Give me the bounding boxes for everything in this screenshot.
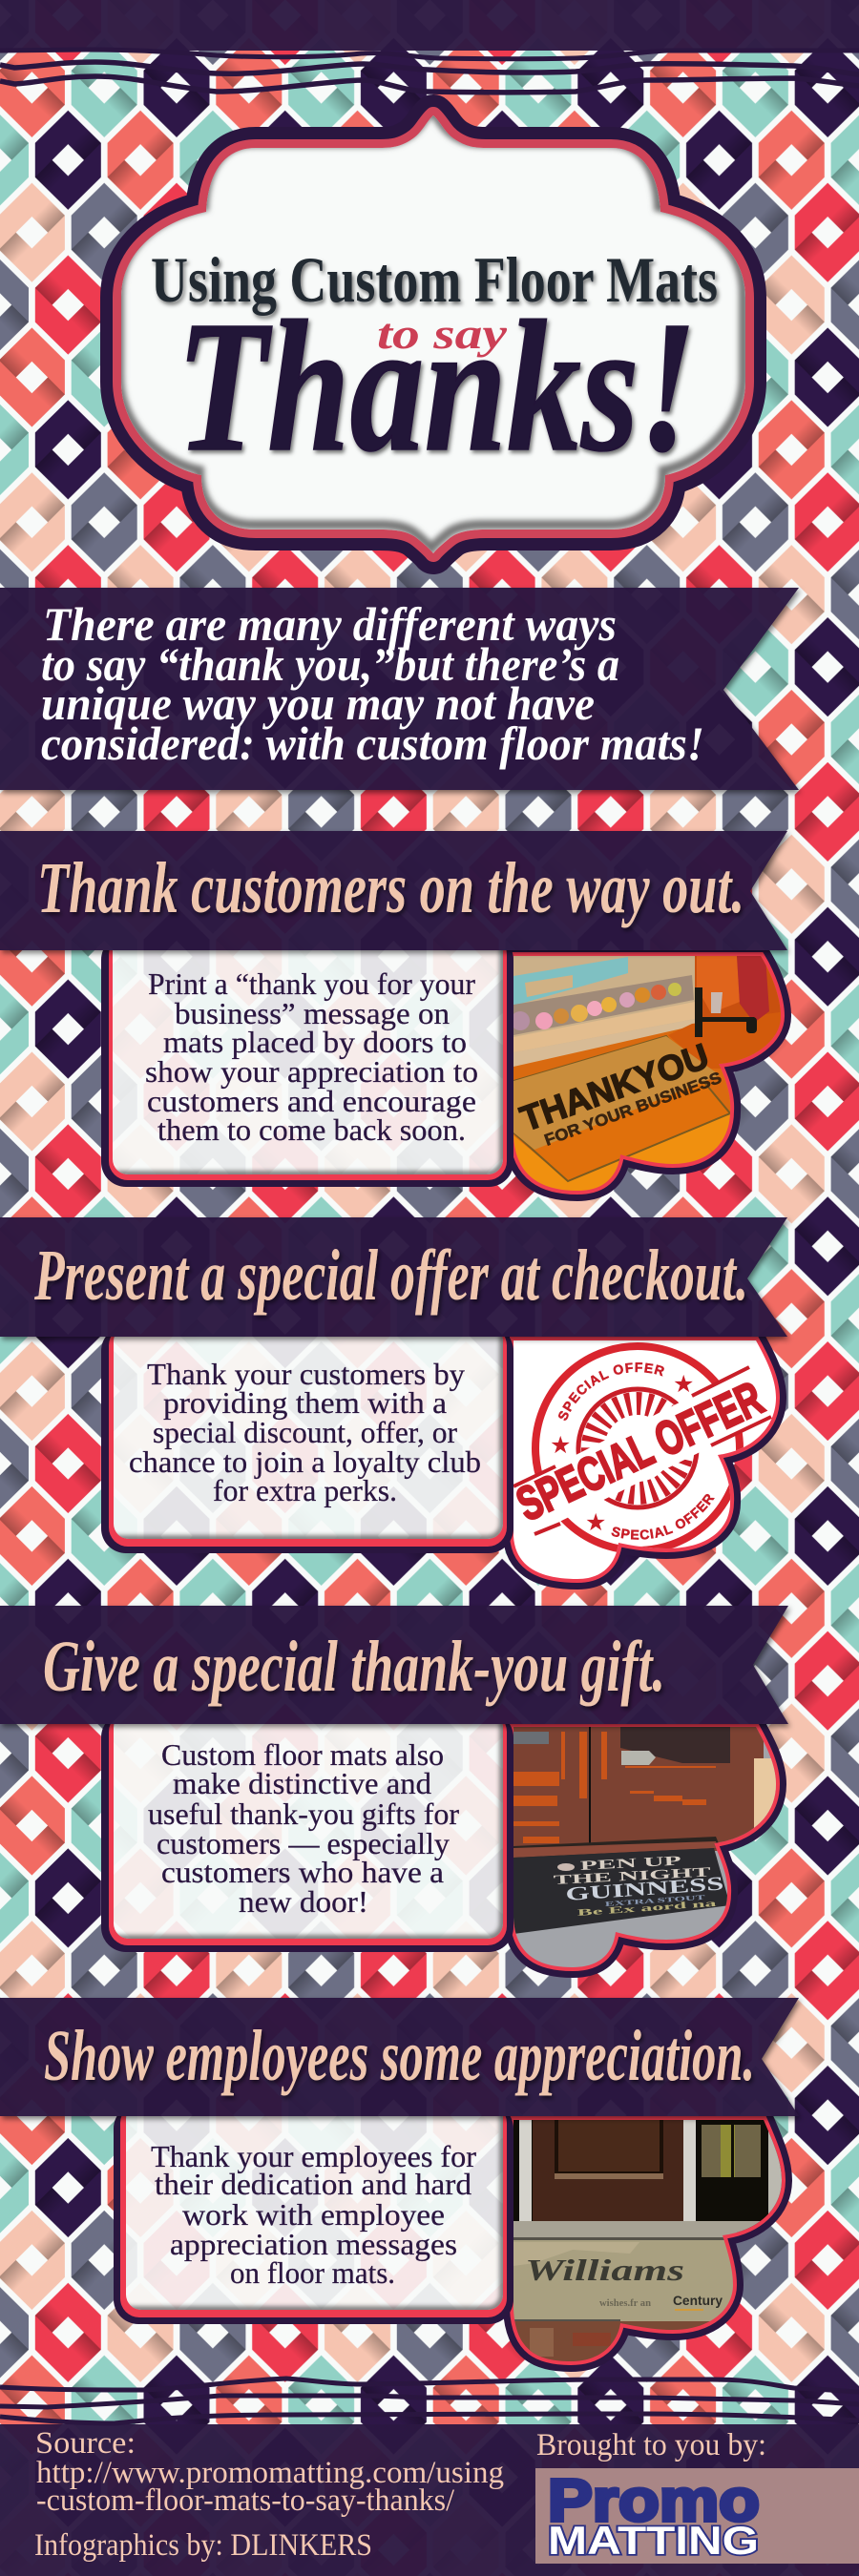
- logo: Promo Matting: [535, 2468, 859, 2564]
- card 2 body text: chance to join a loyalty club: [129, 1444, 481, 1479]
- card 2 body text: providing them with a: [163, 1385, 447, 1420]
- source text: -custom-floor-mats-to-say-thanks/: [36, 2483, 455, 2518]
- card 3 body text: useful thank-you gifts for: [148, 1797, 459, 1831]
- card 4: employees: [114, 2094, 792, 2369]
- card 2 image: special offer stamp: [513, 1340, 776, 1579]
- banner: intro: [0, 588, 799, 790]
- banner: heading 2: [0, 1217, 787, 1337]
- card 4 body text: [151, 2139, 476, 2290]
- mat text: GUINNESS: [565, 1873, 724, 1905]
- intro text: unique way you may not have: [41, 676, 595, 730]
- card 2 image: special offer stamp: ★: [673, 1370, 694, 1398]
- intro text: [41, 597, 704, 770]
- card 3 body text: [148, 1737, 459, 1919]
- mat text: Williams: [525, 2253, 684, 2287]
- card 3 body text: customers who have a: [161, 1855, 444, 1889]
- card 1 image: thank you mat: [513, 956, 781, 1191]
- title plaque: [119, 111, 745, 553]
- card 2 body text: special discount, offer, or: [153, 1415, 457, 1449]
- card 1: thank customers: [101, 950, 791, 1201]
- mat text: EXTRA STOUT: [605, 1894, 706, 1908]
- mat text: Be Ex aord na: [576, 1899, 717, 1919]
- card 4 body text: appreciation messages: [170, 2227, 457, 2261]
- title line: Using Custom Floor Mats: Using Custom Floor Mats: [151, 243, 718, 316]
- banner: heading 1: [0, 831, 787, 950]
- card 4 body text: Thank your employees for: [151, 2139, 476, 2173]
- card 2 body text: for extra perks.: [213, 1473, 397, 1507]
- mat text: [553, 1854, 724, 1919]
- banner: heading 3: [0, 1606, 788, 1724]
- card 2 image: special offer stamp: ★: [585, 1508, 606, 1536]
- intro text: to say “thank you,”but there’s a: [41, 637, 619, 691]
- card 1 body text: show your appreciation to: [145, 1054, 478, 1089]
- logo: Promo Matting: Promo: [548, 2468, 760, 2534]
- logo: Promo Matting: MATTING: [548, 2518, 759, 2563]
- brought by text: Brought to you by:: [536, 2428, 766, 2462]
- title line: to say: to say: [377, 309, 508, 358]
- card 1 body text: them to come back soon.: [157, 1112, 466, 1147]
- card 2 image: special offer stamp: SPECIAL OFFER: [611, 1494, 715, 1540]
- card 2 body text: Thank your customers by: [147, 1357, 465, 1391]
- card 3 body text: Custom floor mats also: [161, 1737, 444, 1772]
- card 4 body text: on floor mats.: [230, 2255, 395, 2290]
- card 3: thank-you gift: [101, 1703, 792, 1975]
- mat text: THE NIGHT: [553, 1865, 712, 1888]
- card 4 body text: their dedication and hard: [155, 2167, 471, 2201]
- card 3 body text: new door!: [239, 1884, 368, 1919]
- card 1 body text: Print a “thank you for your: [148, 966, 475, 1001]
- card 2 body text: [129, 1357, 481, 1507]
- card 2 image: special offer stamp: ★: [550, 1431, 571, 1459]
- card 2: special offer: [101, 1337, 786, 1589]
- mat text: PEN UP: [579, 1854, 682, 1874]
- mat text: THANKYOU: [515, 1036, 714, 1139]
- card 1 body text: [145, 966, 478, 1147]
- card 3 body text: make distinctive and: [173, 1766, 431, 1800]
- source text: Source:: [35, 2426, 136, 2461]
- credit text: Infographics by: DLINKERS: [34, 2528, 372, 2563]
- banner: heading 4: [0, 1998, 799, 2116]
- card 1 body text: business” message on: [175, 996, 450, 1030]
- top decorative band: [0, 0, 859, 93]
- card 4 body text: work with employee: [182, 2197, 445, 2232]
- card 3 image: door and Guinness mat: [513, 1727, 776, 1967]
- card 4 image: door and Williams mat: Century: [673, 2293, 723, 2308]
- bottom footer band: [0, 2379, 859, 2576]
- title line: Thanks!: Thanks!: [177, 281, 697, 490]
- source text: http://www.promomatting.com/using: [36, 2456, 504, 2490]
- intro text: There are many different ways: [43, 597, 617, 651]
- card 3 body text: customers — especially: [157, 1826, 450, 1860]
- intro text: considered: with custom floor mats!: [41, 717, 704, 770]
- card 2 image: special offer stamp: SPECIAL OFFER: [558, 1362, 664, 1421]
- source text: [35, 2426, 504, 2518]
- card 4 image: door and Williams mat: wishes.fr an: [599, 2298, 651, 2309]
- card 4 image: door and Williams mat: [513, 2120, 782, 2361]
- card 1 body text: customers and encourage: [147, 1084, 476, 1118]
- card 1 image: thank you mat: FOR YOUR BUSINESS: [542, 1069, 724, 1150]
- card 1 body text: mats placed by doors to: [163, 1025, 467, 1059]
